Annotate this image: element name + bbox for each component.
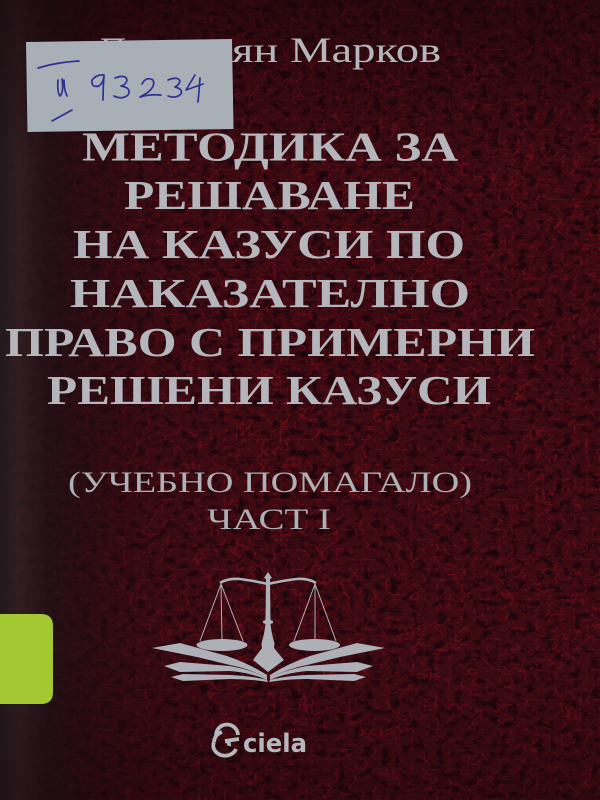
pan strings xyxy=(200,584,336,641)
title: НА КАЗУСИ ПО xyxy=(73,221,465,267)
scale column xyxy=(253,572,284,672)
title: ПРАВО С ПРИМЕРНИ xyxy=(5,319,535,365)
title: РЕШЕНИ КАЗУСИ xyxy=(47,367,491,413)
subtitle: (УЧЕБНО ПОМАГАЛО) xyxy=(68,466,472,499)
icon: scales of justice on open book xyxy=(152,572,385,682)
publisher logo: ciela: ciela xyxy=(243,729,307,759)
title xyxy=(5,124,535,413)
left pan xyxy=(196,639,248,651)
open book pages xyxy=(152,643,267,678)
subtitle xyxy=(68,466,472,536)
library sticker xyxy=(26,39,234,132)
handwritten shelf mark xyxy=(38,61,203,121)
title: НАКАЗАТЕЛНО xyxy=(70,270,470,316)
green sticker xyxy=(0,614,53,704)
title: РЕШАВАНЕ xyxy=(124,172,415,218)
publisher logo: ciela xyxy=(213,724,307,759)
subtitle: ЧАСТ I xyxy=(207,503,331,536)
scale beam xyxy=(220,579,316,584)
author name: ян Марков xyxy=(232,30,441,70)
logo swirl mark xyxy=(213,724,239,756)
title: МЕТОДИКА ЗА xyxy=(82,124,458,170)
right pan xyxy=(289,639,340,651)
author name xyxy=(100,30,441,70)
author name: П xyxy=(100,30,126,70)
